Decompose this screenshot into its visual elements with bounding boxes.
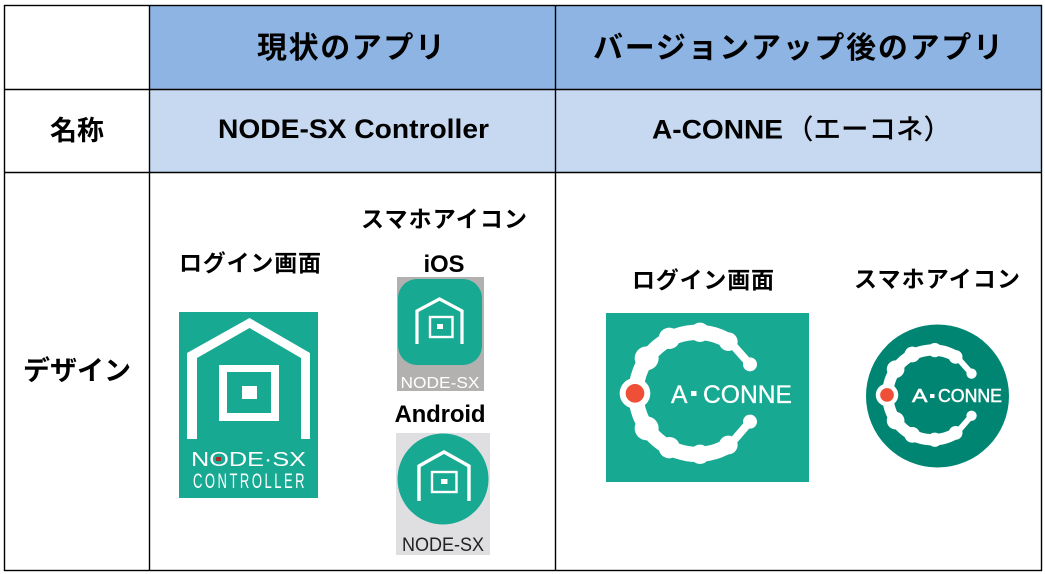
name cell: current app [150,90,555,172]
icon: A-CONNE phone icon: CONNE [938,385,1002,406]
upgraded app name: （エーコネ） [786,114,951,144]
icon: NODE-SX Controller login screen [179,312,318,498]
label: login screen, current: ログイン画面 [179,250,321,276]
icon: NODE-SX Controller login screen: CONTROLLER [193,469,305,493]
icon: A-CONNE login screen: CONNE [703,381,792,409]
label: iOS: iOS [424,251,464,278]
icon: A-CONNE phone icon [866,324,1009,468]
row label: design: デザイン [23,355,131,386]
name cell: upgraded app [556,90,1042,172]
icon: NODE-SX Controller login screen: NODE·SX [191,449,306,471]
heading: current app: 現状のアプリ [257,32,445,65]
icon: Android app icon [396,433,490,556]
row label: name: 名称 [50,116,104,146]
label: phone icon, current: スマホアイコン [361,206,527,232]
header cell: current app [150,6,555,89]
label: login screen, upgraded: ログイン画面 [632,267,774,293]
heading: upgraded app: バージョンアップ後のアプリ [593,32,1003,65]
icon: A-CONNE login screen [606,313,809,482]
icon: A-CONNE phone icon: A [912,385,928,406]
header cell: upgraded app [556,6,1042,89]
icon: Android app icon: NODE-SX [402,535,484,556]
icon: iOS app icon [397,277,484,392]
upgraded app name: A-CONNE [652,114,783,144]
icon: A-CONNE login screen: A [671,381,688,409]
icon: iOS app icon: NODE-SX [400,375,480,392]
label: phone icon, upgraded: スマホアイコン [854,266,1020,292]
label: Android: Android [394,401,486,428]
current app name: NODE-SX Controller [218,114,489,144]
